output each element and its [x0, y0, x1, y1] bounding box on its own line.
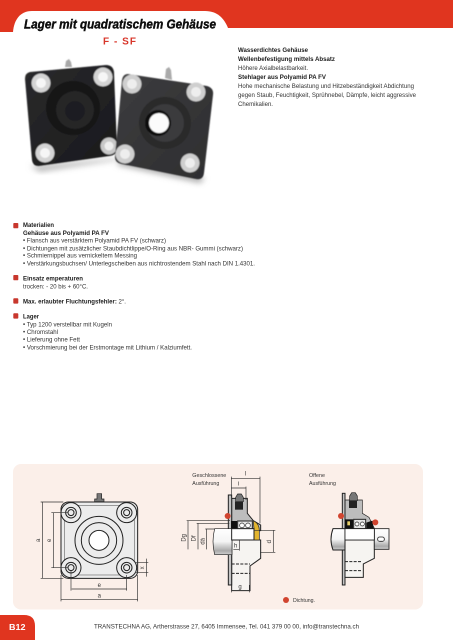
description text block: Hohe mechanische Belastung und Hitzebeständigkeit Abdichtung [238, 84, 414, 90]
description text block: Chemikalien. [238, 102, 273, 108]
footer address: TRANSTECHNA AG, Artherstrasse 27, 6405 Immensee, Tel. 041 379 00 00, info@transtechna.ch [94, 624, 359, 630]
section: Materialien: Gehäuse aus Polyamid PA FV [23, 231, 109, 237]
description text block: Höhere Axialbelastbarkeit. [238, 66, 308, 72]
product photo: two square bearings [25, 59, 213, 183]
housing square [61, 502, 138, 578]
drawing: open bearing section [331, 493, 389, 585]
section: Lager: • Lieferung ohne Fett [23, 338, 80, 344]
section: Lager: • Chromstahl [23, 330, 58, 336]
drawing label: closed version: Ausführung [192, 481, 219, 487]
section: Materialien: • Flansch aus verstärktem Polyamid PA FV (schwarz) [23, 239, 166, 245]
yellow cap [253, 521, 259, 540]
dimension labels: a [36, 538, 42, 542]
dimension labels: Dg [182, 534, 188, 542]
description text block: Stehlager aus Polyamid PA FV [238, 75, 326, 81]
seal and ball bearing [345, 519, 353, 529]
header bar [0, 0, 453, 34]
seal marker [225, 513, 231, 519]
section: Materialien: • Verstärkungsbuchsen/ Unterlegscheiben aus nichtrostendem Stahl nach DIN 1.4301. [23, 261, 255, 267]
drawing: front view [36, 494, 148, 601]
drawing label: open version: Offene [309, 473, 325, 479]
grease nipple [236, 494, 243, 502]
section: Materialien: • Dichtungen mit zusätzlicher Staubdichtlippe/O-Ring aus NBR- Gummi (schwarz) [23, 246, 243, 252]
drawing: closed bearing section [182, 472, 275, 592]
flange plate [228, 495, 232, 585]
dimension labels: g [238, 585, 242, 591]
housing body [345, 500, 374, 528]
dimension labels: a [98, 594, 102, 600]
section: Materialien: • Schmiernippel aus vernickeltem Messing [23, 254, 137, 260]
drawing label: open version: Ausführung [309, 481, 336, 487]
bullet: Materialien [13, 223, 18, 228]
dimension labels: i [238, 481, 239, 487]
section: Einsatztemperaturen [13, 275, 88, 290]
description text block: gegen Staub, Feuchtigkeit, Sprühnebel, Dämpfe, leicht aggressive [238, 93, 417, 99]
section: Fluchtungsfehler: Max. erlaubter Fluchtungsfehler: 2°. [23, 299, 126, 305]
bearing closed [25, 59, 120, 172]
mounting holes [61, 503, 137, 578]
description text block: Wasserdichtes Gehäuse [238, 48, 309, 54]
section: Lager: • Vorschmierung bei der Erstmontage mit Lithium / Kalziumfett. [23, 345, 192, 351]
dimension lines [187, 477, 275, 592]
section: Einsatztemperaturen: Einsatz emperaturen [23, 277, 83, 283]
legend: seal [283, 597, 315, 604]
dimension labels: e [47, 538, 53, 542]
seal markers [338, 513, 344, 519]
dimension labels: x [140, 566, 146, 569]
seal and ball bearing [231, 521, 237, 529]
section: Einsatztemperaturen: trocken: - 20 bis + 60°C. [23, 284, 88, 290]
flange plate [342, 493, 345, 585]
drawing label: closed version: Geschlossene [192, 473, 226, 479]
dimension labels: Df [191, 535, 197, 541]
section: Lager [13, 313, 192, 351]
dimension labels: e [98, 583, 102, 589]
title tab [13, 11, 228, 34]
dimension lines [41, 502, 148, 601]
section: Lager: • Typ 1200 verstellbar mit Kugeln [23, 322, 112, 328]
bullet: Fluchtungsfehler [13, 298, 18, 304]
dimension labels: dà [200, 537, 206, 545]
panel: technical drawings [13, 464, 423, 610]
drawing label: closed version [192, 473, 226, 487]
page tab: B12 [9, 622, 26, 632]
dimension labels: l [245, 472, 246, 478]
dimension labels [36, 538, 146, 600]
description text block: Wellenbefestigung mittels Absatz [238, 57, 335, 63]
section: Lager: Lager [23, 315, 40, 321]
centre rings [75, 516, 123, 564]
shaft [331, 529, 345, 550]
description text block [238, 48, 417, 108]
shaft [213, 529, 254, 555]
bullet: Lager [13, 313, 18, 319]
subtitle: F - SF [103, 36, 136, 48]
section: Materialien: Materialien [23, 223, 54, 229]
title: Lager mit quadratischem Gehäuse [24, 16, 216, 32]
page tab [0, 615, 35, 640]
dimension labels [182, 472, 273, 591]
section: Materialien [13, 223, 255, 267]
grease nipple [350, 493, 357, 501]
dashed bolt hole [232, 564, 250, 573]
dimension labels: d [267, 540, 273, 543]
dimension labels: h [234, 543, 237, 549]
drawing label: open version [309, 473, 336, 487]
legend: seal: Dichtung. [293, 598, 315, 604]
grease nipple [95, 494, 104, 502]
dashed bolt hole [345, 562, 362, 571]
shaft keyway [378, 537, 384, 541]
bullet: Einsatztemperaturen [13, 275, 18, 280]
housing body [232, 498, 261, 531]
bearing open [115, 67, 213, 183]
